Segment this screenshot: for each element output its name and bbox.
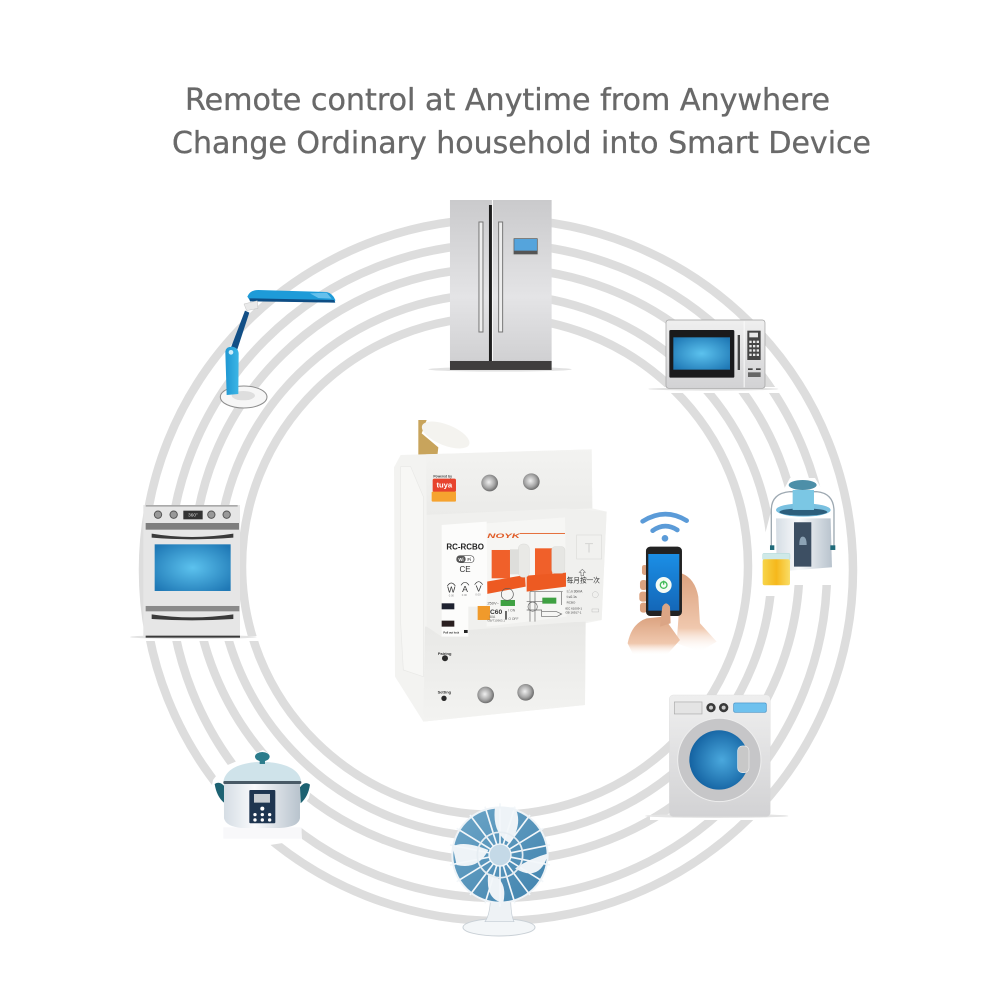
rating marks: I ON [508,609,516,613]
brand line [487,533,565,540]
test button: T [585,539,594,555]
rating marks: O OFF [508,617,518,621]
meter icons: A [462,584,468,594]
smartphone in hand [628,514,717,655]
meter icons: V [476,583,482,593]
buttons: Pull out lock [443,631,460,635]
icon: washing machine [645,695,788,818]
right panel notes: t ≤0.1s [567,595,577,599]
tuya badge: tuya [436,481,453,490]
icon: microwave [648,320,778,391]
pairing button: Pairing [438,651,452,656]
CE mark: CE [459,565,471,574]
left module [442,522,487,637]
smart circuit breaker [394,416,607,722]
rating marks: 50A [489,615,496,619]
model label: RC-RCBO [446,543,484,552]
buttons [442,603,468,635]
icon: refrigerator [428,200,572,372]
orange clip [478,606,490,620]
white gaps cutting rings around appliances [120,387,838,845]
breaker body [394,449,607,722]
circuit diagram [527,592,563,622]
setting button: Setting [438,690,452,695]
meter icons: W [447,585,456,595]
hands [628,565,717,655]
right panel notes: 每月按一次 [567,576,600,585]
meter icons: 0.00 [462,593,467,597]
icon: rice cooker [215,752,310,839]
icon: electric fan [450,803,550,936]
wifi badge [457,556,474,563]
right panel notes: IEC 61009-1 [565,607,582,611]
terminal screws [477,473,540,703]
icon: desk lamp [220,290,335,408]
icon: oven: 360° [188,513,198,518]
meter icons [447,582,483,598]
pointing finger [660,603,671,627]
antenna [418,416,473,456]
meter icons: 0.00 [475,592,481,596]
tuya badge: Powered by [433,474,452,478]
pairing button [438,651,452,661]
setting button [438,690,452,701]
brand line: NOYK [487,533,522,540]
rating marks: C60 [490,609,502,616]
rating marks: 250V~ [487,601,500,606]
test button [577,535,602,559]
right panel notes: RCBO [567,600,576,604]
heading line 1: Remote control at Anytime from Anywhere [185,83,830,118]
concentric signal rings [143,219,853,921]
wifi badge: Fi [467,557,471,562]
right panel notes: I△n 30mA [567,588,583,593]
orange switch handles [487,544,566,594]
title [172,83,871,161]
icon: juicer [763,480,835,585]
heading line 2: Change Ordinary household into Smart Device [172,126,871,161]
icon: oven [130,505,257,639]
tuya badge [432,474,456,502]
icon: wifi signal [643,514,687,542]
right panel notes: GB 16917-1 [565,611,582,615]
right panel notes [565,569,600,615]
phone [646,547,682,616]
rating marks: GB/T10963.1 [487,618,505,622]
rating marks [487,588,518,622]
wifi badge: Wi [458,557,464,562]
middle band [427,508,607,637]
meter icons: 0.00 [449,594,454,598]
